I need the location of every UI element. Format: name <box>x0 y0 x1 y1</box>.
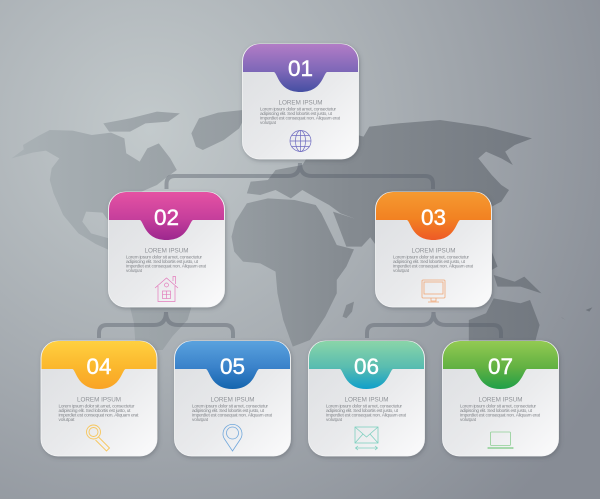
card 05 header <box>175 341 290 389</box>
body text: adipiscing elit. Sed lobortis est justo, ut <box>192 408 265 414</box>
body text: adipiscing elit. Sed lobortis est justo, ut <box>393 259 466 265</box>
heading: LOREM IPSUM <box>344 396 389 404</box>
body text <box>58 404 139 423</box>
body text <box>326 404 407 423</box>
body text <box>126 254 207 274</box>
heading: LOREM IPSUM <box>210 396 255 404</box>
body text: Lorem ipsum dolor sit amet, consectetur <box>192 404 268 410</box>
icon: envelope <box>355 427 378 450</box>
card 02 header <box>109 192 224 240</box>
heading: LOREM IPSUM <box>411 248 456 254</box>
body text: volutpat <box>326 417 343 423</box>
heading: LOREM IPSUM <box>278 100 323 106</box>
number 07: 07 <box>488 354 513 379</box>
heading: LOREM IPSUM <box>478 396 523 404</box>
connector: left bracket <box>99 312 233 338</box>
body text: volutpat <box>460 417 477 423</box>
body text: volutpat <box>192 417 209 423</box>
body text: imperdiet est consequat non. Aliquam erat <box>460 412 541 418</box>
body text: adipiscing elit. Sed lobortis est justo, ut <box>58 408 131 414</box>
icon: monitor <box>422 280 445 302</box>
body text: adipiscing elit. Sed lobortis est justo, ut <box>460 408 533 414</box>
card 03 <box>376 192 492 307</box>
connector: top bracket <box>166 163 433 189</box>
body text: Lorem ipsum dolor sit amet, consectetur <box>393 254 469 260</box>
body text: volutpat <box>126 268 143 274</box>
body text: Lorem ipsum dolor sit amet, consectetur <box>126 254 202 260</box>
card 06 header <box>309 341 424 389</box>
body text: Lorem ipsum dolor sit amet, consectetur <box>260 106 336 112</box>
card 01 header <box>243 44 358 92</box>
body text: imperdiet est consequat non. Aliquam erat <box>326 412 407 418</box>
number 04: 04 <box>86 354 112 379</box>
card 04 <box>41 341 157 456</box>
number 03: 03 <box>421 205 446 230</box>
connector: right bracket <box>367 312 501 338</box>
body text: Lorem ipsum dolor sit amet, consectetur <box>460 404 536 410</box>
card 03 header <box>376 192 491 240</box>
body text <box>192 404 273 423</box>
body text: adipiscing elit. Sed lobortis est justo, ut <box>126 259 199 265</box>
body text: imperdiet est consequat non. Aliquam erat <box>58 412 139 418</box>
body text: imperdiet est consequat non. Aliquam erat <box>260 116 341 122</box>
body text: adipiscing elit. Sed lobortis est justo, ut <box>326 408 399 414</box>
body text: volutpat <box>393 268 410 274</box>
world map <box>11 109 592 350</box>
icon: globe <box>290 130 311 152</box>
body text: imperdiet est consequat non. Aliquam erat <box>393 264 474 270</box>
card 06 <box>308 341 424 456</box>
card 07 <box>442 341 558 456</box>
number 01: 01 <box>288 56 313 81</box>
card 05 <box>174 341 290 456</box>
card 04 header <box>42 341 156 389</box>
body text: imperdiet est consequat non. Aliquam erat <box>192 412 273 418</box>
number 05: 05 <box>220 354 245 379</box>
body text <box>260 106 341 126</box>
heading: LOREM IPSUM <box>144 248 189 254</box>
icon: map pin <box>223 424 242 451</box>
card 07 header <box>443 341 558 389</box>
body text: Lorem ipsum dolor sit amet, consectetur <box>326 404 402 410</box>
body text: imperdiet est consequat non. Aliquam erat <box>126 264 207 270</box>
card 02 <box>108 192 224 307</box>
body text: volutpat <box>260 120 277 126</box>
body text: adipiscing elit. Sed lobortis est justo, ut <box>260 111 333 117</box>
body text: Lorem ipsum dolor sit amet, consectetur <box>58 404 135 410</box>
heading: LOREM IPSUM <box>77 396 121 404</box>
icon: house <box>155 276 178 302</box>
number 02: 02 <box>154 205 179 230</box>
body text <box>460 404 541 423</box>
card 01 <box>242 44 358 159</box>
body text: volutpat <box>58 417 75 423</box>
icon: magnifier <box>86 425 110 451</box>
icon: laptop <box>488 432 513 448</box>
number 06: 06 <box>354 354 379 379</box>
body text <box>393 254 474 274</box>
